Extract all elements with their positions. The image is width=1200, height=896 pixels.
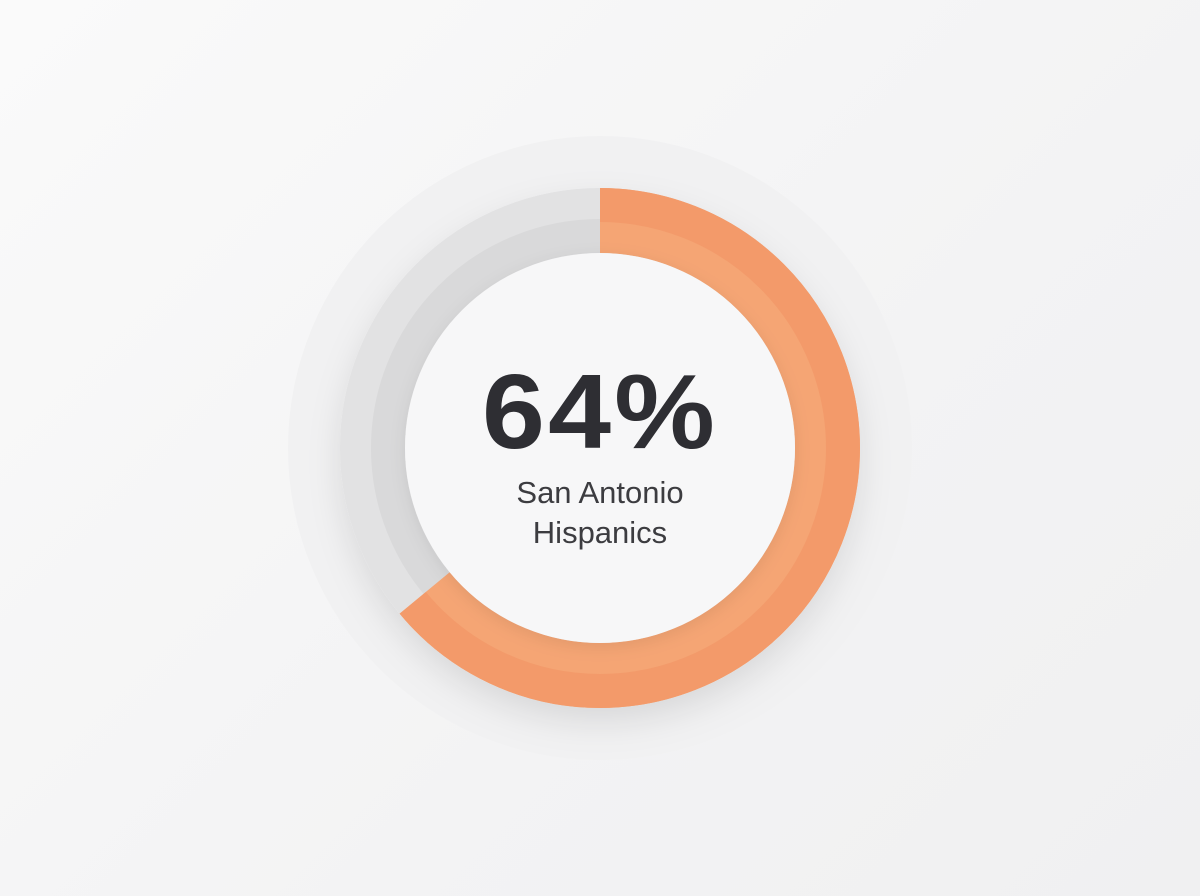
value text: 64%: [482, 353, 718, 471]
orange arc 64%: [357, 205, 843, 691]
ring track: [372, 220, 828, 676]
outer halo disc: [288, 136, 912, 760]
label text: San Antonio: [516, 475, 684, 510]
label text: Hispanics: [533, 515, 667, 550]
inner circle: [405, 253, 795, 643]
label text: [516, 475, 684, 550]
